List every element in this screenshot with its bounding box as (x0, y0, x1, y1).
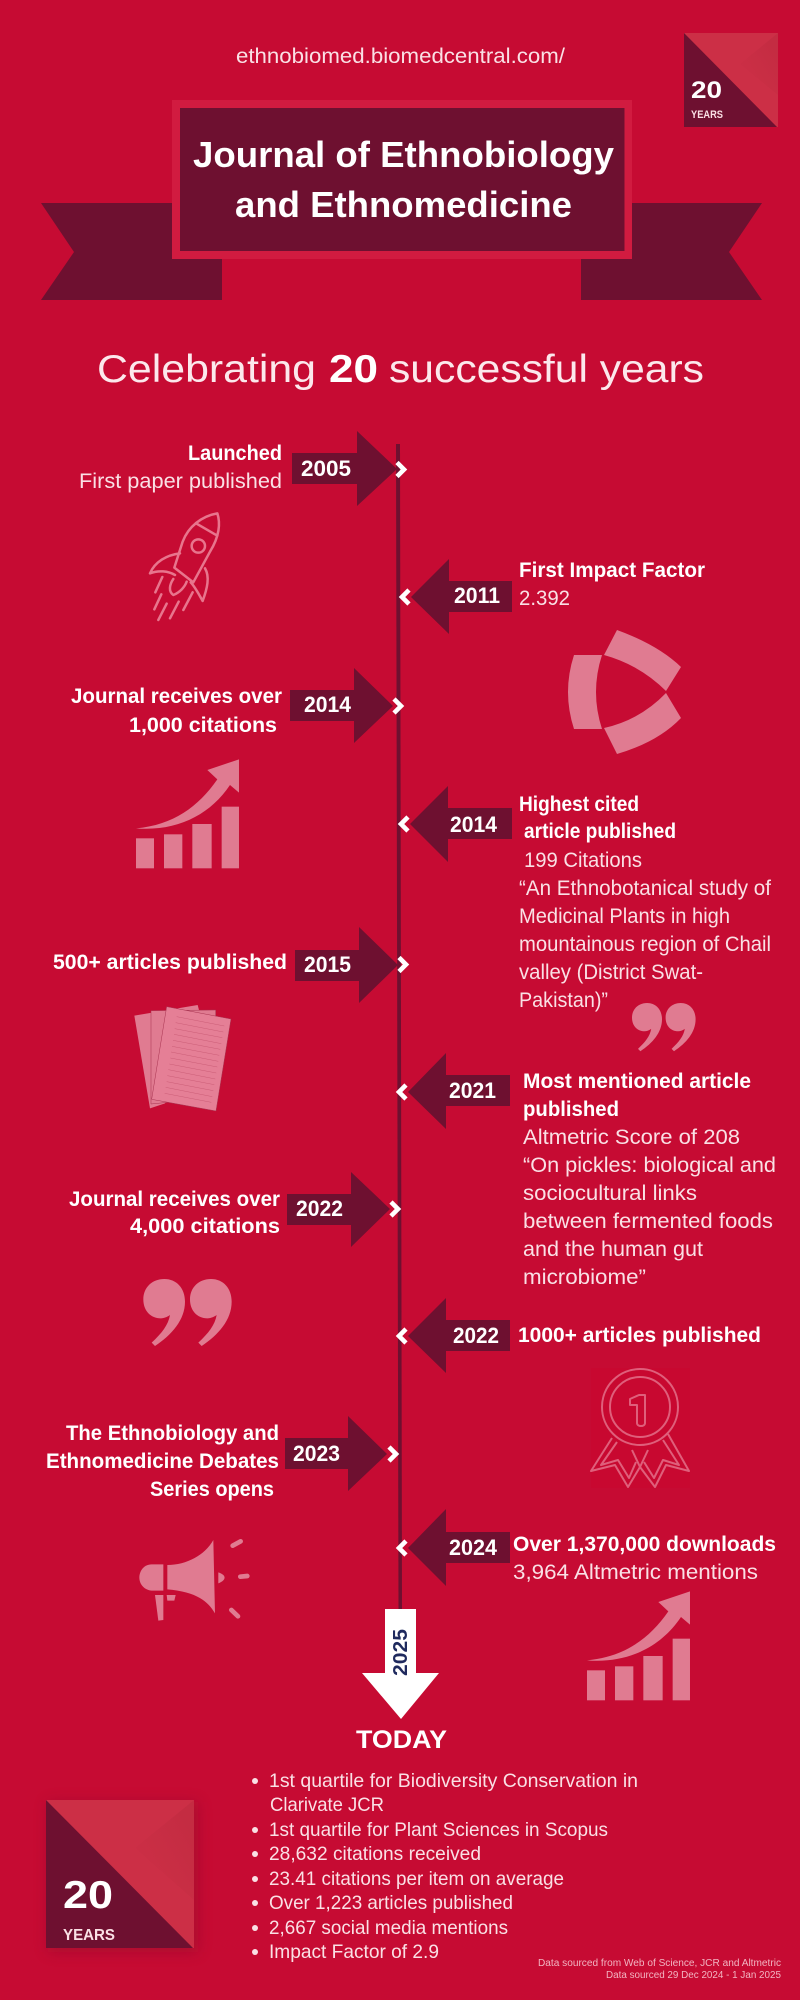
text: 1,000 citations: 1,000 citations (129, 714, 277, 737)
text: highest cited: Pakistan)” (519, 989, 608, 1012)
icon: rocket (150, 513, 219, 620)
icon: growth chart (136, 759, 239, 868)
text: highest cited: Medicinal Plants in high (519, 905, 730, 928)
badge: 20 years small: YEARS (691, 109, 723, 121)
arrow 2014 (290, 668, 401, 743)
timeline line (396, 444, 402, 1612)
today stats list: 2,667 social media mentions (269, 1917, 508, 1939)
badge: 20 years large: YEARS (63, 1927, 115, 1944)
arrow 2015 (295, 927, 406, 1003)
year 2014: 2014 (304, 692, 352, 717)
icon: growth chart (587, 1591, 690, 1700)
year 2024: 2024 (449, 1535, 498, 1560)
text: downloads: 3,964 Altmetric mentions (513, 1561, 758, 1584)
text: 500+ articles: 500+ articles published (53, 951, 287, 974)
title frame (172, 100, 632, 259)
journal title: Journal of Ethnobiology (193, 134, 614, 175)
text: 4,000 citations: Journal receives over (69, 1188, 280, 1211)
icon: papers (134, 1005, 231, 1111)
badge: 20 years small (684, 33, 778, 127)
arrow 2014 (401, 786, 512, 862)
title banner (41, 100, 762, 300)
text: downloads (513, 1533, 776, 1584)
text: highest cited: Highest cited (519, 793, 639, 816)
text: most mentioned: sociocultural links (523, 1182, 697, 1205)
text: first impact factor: First Impact Factor (519, 559, 705, 582)
today stats list: 28,632 citations received (269, 1843, 481, 1865)
arrow 2022 (399, 1298, 510, 1373)
text: 4,000 citations: 4,000 citations (130, 1215, 280, 1238)
today heading: TODAY (356, 1726, 447, 1754)
journal title (193, 134, 614, 225)
year 2022: 2022 (453, 1323, 499, 1348)
journal title: and Ethnomedicine (235, 184, 572, 225)
text: 4,000 citations (69, 1188, 280, 1238)
text: launched: First paper published (79, 470, 282, 493)
text: most mentioned: between fermented foods (523, 1210, 773, 1233)
text: most mentioned: microbiome” (523, 1266, 646, 1289)
text: debates series (46, 1422, 279, 1501)
text: 1,000 citations (71, 685, 282, 737)
down arrow 2025 (362, 1609, 439, 1719)
today stats list: 23.41 citations per item on average (269, 1868, 564, 1890)
title panel (180, 108, 624, 251)
arrow 2023 (285, 1416, 396, 1491)
icon: medal (591, 1368, 690, 1488)
text: most mentioned: published (523, 1098, 619, 1121)
arrow 2022 (287, 1172, 398, 1247)
subtitle: successful years (389, 348, 704, 391)
text: first impact factor: 2.392 (519, 587, 570, 610)
text: first impact factor (519, 559, 705, 610)
event: 2011 first impact factor (402, 559, 705, 754)
icon: quotation mark (143, 1279, 232, 1346)
event: 2014 1,000 citations (71, 668, 401, 868)
event: 2015 500+ articles (53, 927, 406, 1111)
subtitle (97, 348, 704, 391)
text: launched: Launched (188, 442, 282, 465)
event: 2024 downloads (399, 1509, 776, 1700)
badge: 20 years large: 20 (63, 1874, 113, 1917)
icon: quotation mark (632, 1003, 696, 1051)
text: most mentioned: Altmetric Score of 208 (523, 1126, 740, 1149)
badge: 20 years large (46, 1800, 198, 1952)
year 2015: 2015 (304, 952, 351, 977)
text: highest cited: “An Ethnobotanical study of (519, 877, 771, 900)
text: highest cited: 199 Citations (524, 849, 642, 872)
text: highest cited: valley (District Swat- (519, 961, 703, 984)
arrow 2011 (402, 559, 512, 634)
year 2021: 2021 (449, 1078, 496, 1103)
ribbon right (581, 203, 762, 300)
event: 2023 debates series (46, 1416, 396, 1621)
arrow 2021 (399, 1053, 510, 1129)
ribbon left (41, 203, 222, 300)
data source note: Data sourced 29 Dec 2024 - 1 Jan 2025 (606, 1970, 781, 1981)
data source note: Data sourced from Web of Science, JCR and Altmetric (538, 1958, 781, 1969)
arrow 2005 (292, 431, 404, 506)
badge: 20 years small: 20 (691, 77, 722, 104)
icon: megaphone (139, 1540, 247, 1621)
arrow 2024 (399, 1509, 510, 1586)
text: highest cited: article published (524, 820, 676, 843)
event: 2005 launched (79, 431, 404, 620)
text: most mentioned: and the human gut (523, 1238, 703, 1261)
text: debates series: Series opens (150, 1478, 274, 1501)
year 2011: 2011 (454, 583, 500, 608)
event: 2014 highest cited article (401, 786, 771, 1051)
today stats list: Impact Factor of 2.9 (269, 1941, 439, 1963)
text: most mentioned: “On pickles: biological and (523, 1154, 776, 1177)
today stats list: 1st quartile for Biodiversity Conservation in (269, 1770, 638, 1792)
subtitle: 20 (329, 348, 378, 391)
text: most mentioned: Most mentioned article (523, 1070, 751, 1093)
year 2022: 2022 (296, 1196, 343, 1221)
year 2023: 2023 (293, 1441, 340, 1466)
today stats list: Clarivate JCR (270, 1794, 384, 1816)
text: highest cited (519, 793, 771, 1012)
year 2025: 2025 (390, 1629, 412, 1676)
text: 1,000 citations: Journal receives over (71, 685, 282, 708)
year 2014: 2014 (450, 812, 498, 837)
subtitle: Celebrating (97, 348, 316, 391)
event: 2021 most mentioned article (399, 1053, 776, 1289)
website url: ethnobiomed.biomedcentral.com/ (236, 45, 565, 68)
text: launched (79, 442, 282, 493)
data source note (538, 1958, 781, 1981)
event: 2022 4,000 citations (69, 1172, 398, 1346)
icon: impact logo (568, 630, 681, 754)
today stats list: 1st quartile for Plant Sciences in Scopus (269, 1819, 608, 1841)
text: debates series: Ethnomedicine Debates (46, 1450, 279, 1473)
year 2005: 2005 (301, 456, 351, 481)
event: 2022 1000+ articles (399, 1298, 761, 1488)
text: highest cited: mountainous region of Chail (519, 933, 771, 956)
text: debates series: The Ethnobiology and (66, 1422, 279, 1445)
today stats list: Over 1,223 articles published (269, 1892, 513, 1914)
text: downloads: Over 1,370,000 downloads (513, 1533, 776, 1556)
text: most mentioned (523, 1070, 776, 1289)
today stats list (252, 1770, 638, 1963)
text: 1000+ articles: 1000+ articles published (518, 1324, 761, 1347)
